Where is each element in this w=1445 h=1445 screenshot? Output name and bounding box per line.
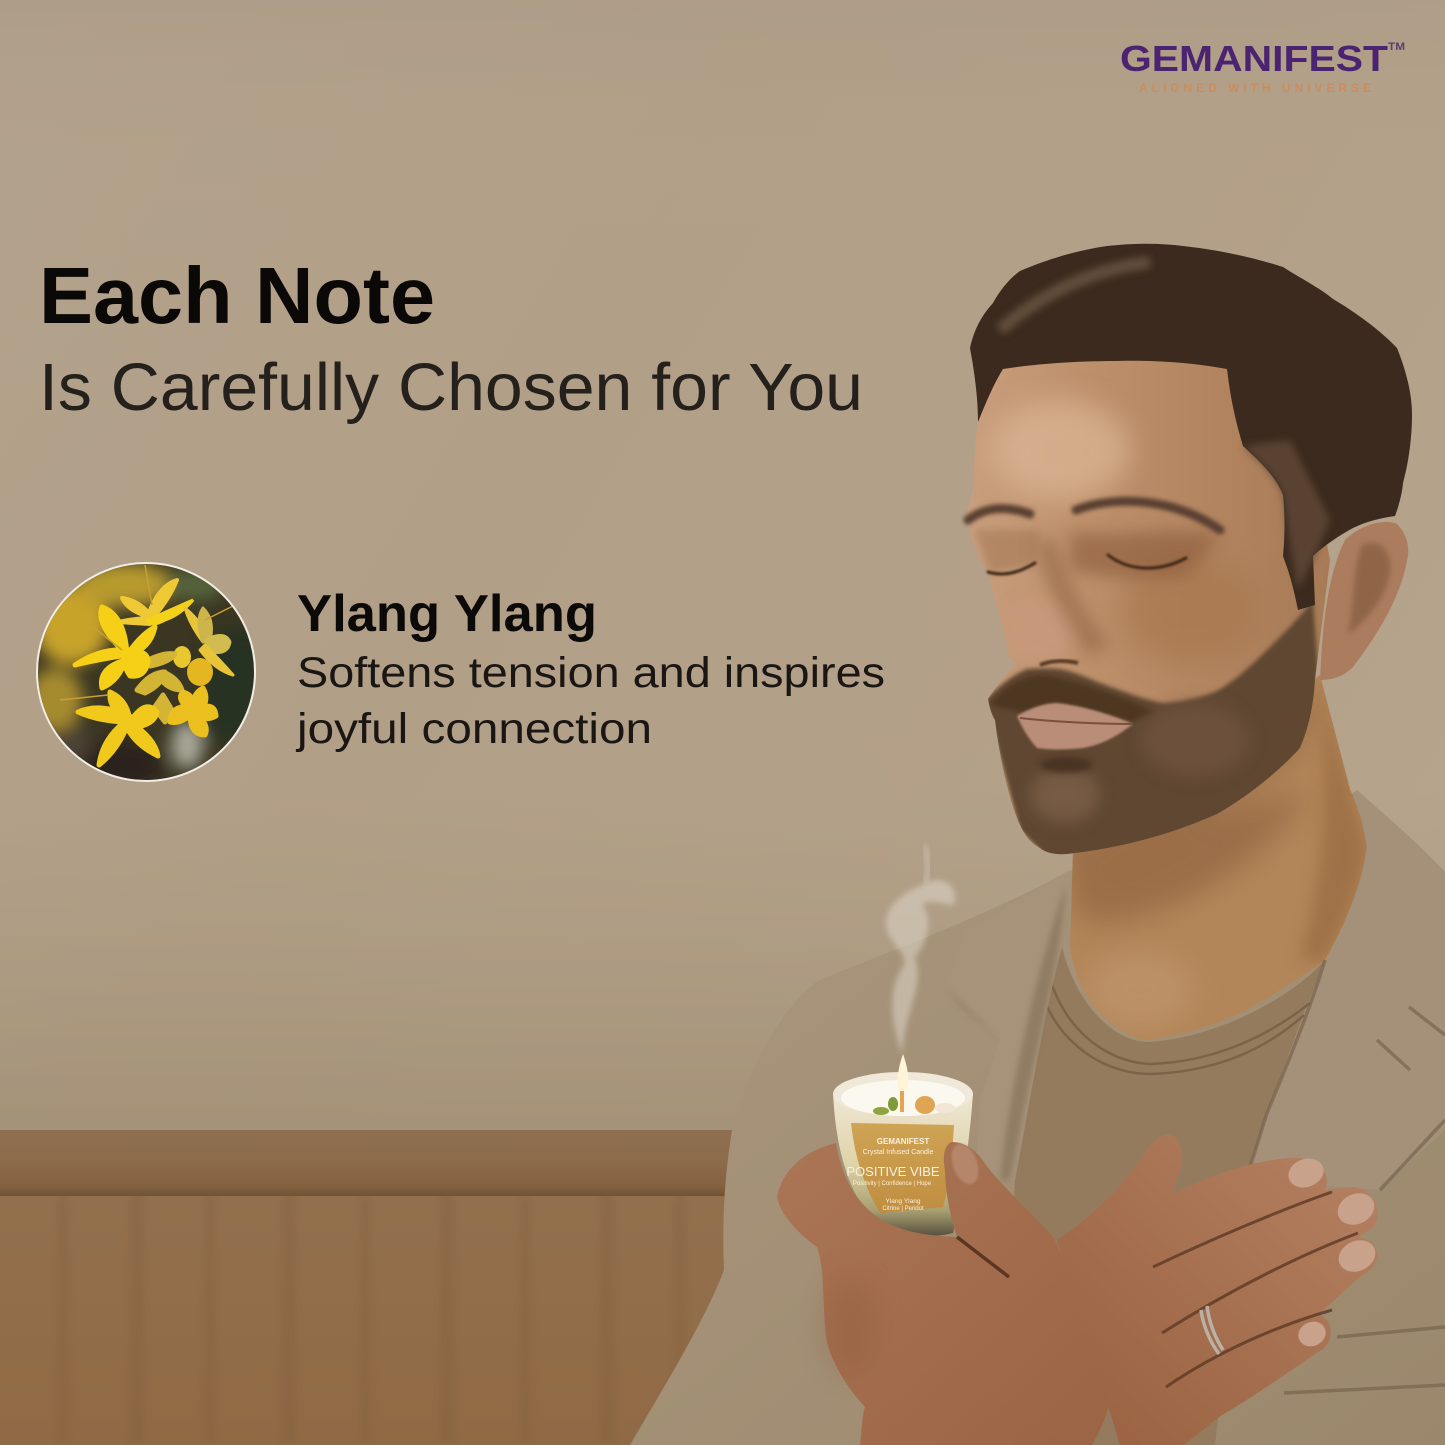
stamens <box>60 565 235 700</box>
note description <box>295 585 885 753</box>
tagline: ALIGNED WITH UNIVERSE <box>1139 81 1371 95</box>
forehead highlight <box>990 400 1130 500</box>
logo wordmark: GEMANIFEST <box>1120 38 1388 79</box>
jacket body <box>630 790 1445 1445</box>
thumb crease <box>957 1237 1009 1277</box>
holding hand <box>777 1142 1110 1445</box>
thumb nail <box>947 1140 983 1188</box>
flower B <box>78 692 158 765</box>
nose <box>1034 606 1070 655</box>
right lapel <box>1246 790 1445 1190</box>
mouth line <box>1020 718 1132 724</box>
small bud <box>173 646 191 668</box>
ylang ylang flower photo <box>36 562 256 782</box>
flower photo ring <box>37 563 255 781</box>
botanicals <box>873 1096 955 1115</box>
soul patch <box>1040 757 1092 773</box>
chin stubble highlight <box>1030 767 1100 823</box>
label text: GEMANIFEST <box>877 1137 929 1146</box>
nostril <box>1040 661 1078 665</box>
flower E <box>170 688 216 735</box>
flame <box>898 1054 908 1091</box>
t-shirt <box>1000 947 1325 1445</box>
hair <box>970 244 1412 610</box>
wick <box>900 1084 904 1112</box>
label text: POSITIVE VIBE <box>846 1164 940 1179</box>
moustache dark <box>990 675 1155 722</box>
cheek warmth <box>1120 561 1248 662</box>
jar rim <box>833 1072 973 1116</box>
glass jar <box>833 1093 973 1236</box>
knuckle shading <box>824 1275 876 1375</box>
finger gaps <box>1153 1192 1358 1387</box>
note copy line two: joyful connection <box>295 705 652 753</box>
bud <box>187 658 213 686</box>
blurred background <box>38 564 254 780</box>
candle <box>777 1054 1110 1445</box>
flower D right <box>185 608 233 675</box>
note name: Ylang Ylang <box>297 585 597 643</box>
eye socket shadow <box>1070 530 1220 579</box>
shirt collar ribbing <box>1044 985 1310 1074</box>
wood wainscot <box>0 1130 760 1445</box>
hair fade <box>1243 440 1330 590</box>
neck <box>1070 675 1367 1040</box>
man portrait illustration <box>630 244 1445 1445</box>
hair highlight <box>1000 262 1150 330</box>
closed eyes <box>988 555 1186 574</box>
wax top <box>841 1080 965 1116</box>
ear <box>1320 522 1408 680</box>
label <box>851 1123 954 1213</box>
label text <box>846 1137 940 1212</box>
lapel seams <box>1246 960 1445 1393</box>
beard <box>985 601 1320 870</box>
wedding ring <box>1201 1306 1223 1354</box>
lapel shading <box>946 885 1066 1180</box>
label text: Citrine | Peridot <box>882 1206 924 1212</box>
heading <box>39 251 863 425</box>
label text: Crystal Infused Candle <box>863 1149 934 1156</box>
right hand on chest <box>1057 1135 1378 1445</box>
heading line one: Each Note <box>39 251 435 340</box>
flower C top <box>118 580 177 624</box>
left lapel <box>946 870 1070 1180</box>
trademark: TM <box>1388 41 1405 53</box>
finger nails <box>1284 1154 1381 1351</box>
ear inner shadow <box>1348 543 1390 635</box>
note copy line one: Softens tension and inspires <box>297 649 885 697</box>
flower F olive petals <box>137 654 182 722</box>
face <box>967 360 1330 854</box>
eyebrows <box>968 501 1220 530</box>
lips <box>1017 703 1133 750</box>
smoke <box>886 845 955 1055</box>
heading line two: Is Carefully Chosen for You <box>39 350 863 425</box>
label text: Ylang Ylang <box>886 1198 921 1205</box>
flower A <box>75 607 155 688</box>
logo <box>1120 38 1405 95</box>
label text: Positivity | Confidence | Hope <box>853 1181 932 1187</box>
